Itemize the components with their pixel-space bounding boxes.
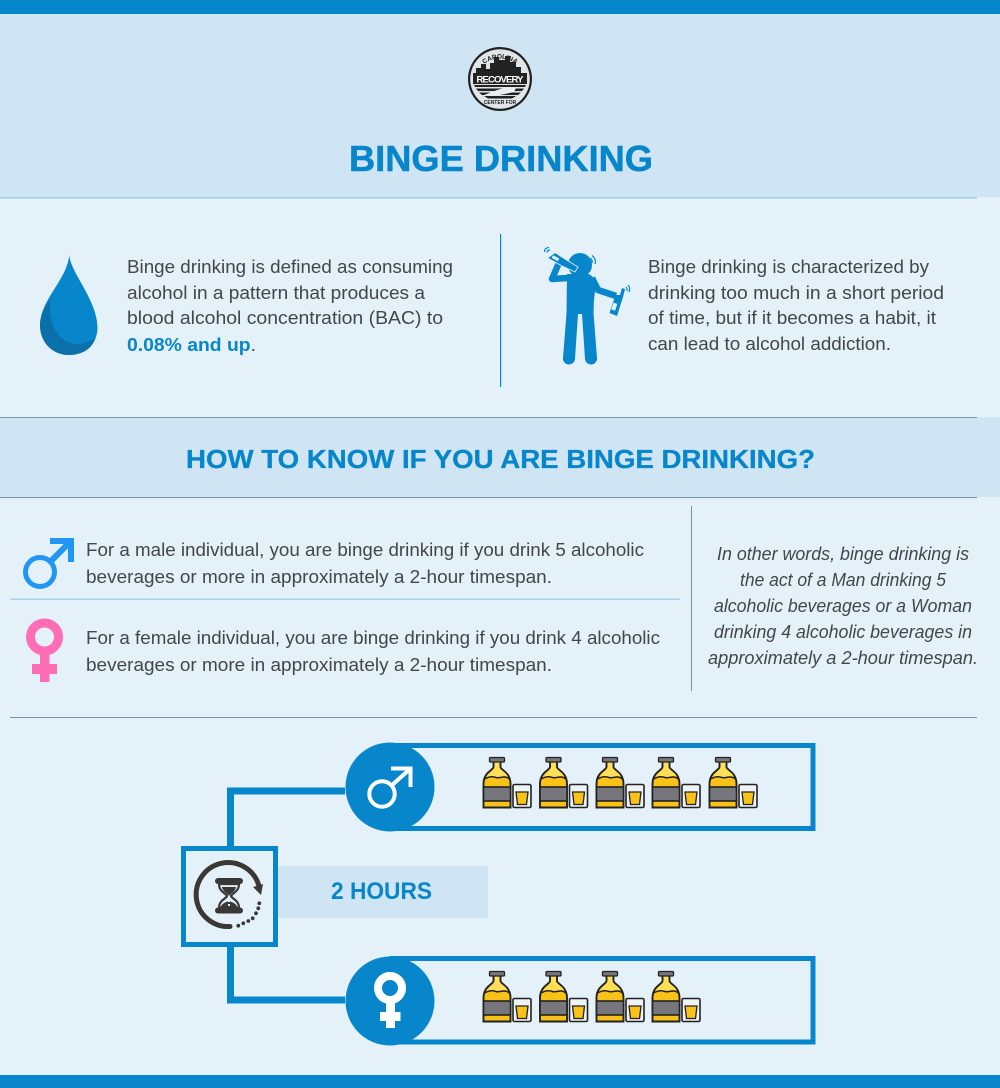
bottom bar: [0, 1075, 1000, 1088]
text: characterization: of time, but if it becomes a habit, it: [648, 307, 936, 328]
icon: hourglass with circular arrow: [196, 863, 263, 928]
text: BAC definition: Binge drinking is defined as consuming: [127, 256, 453, 277]
top bar: [0, 0, 1000, 14]
male badge: [346, 742, 434, 832]
text: in other words: drinking 4 alcoholic beverages in: [714, 621, 972, 642]
text: characterization: [648, 256, 944, 354]
logo: Carolina Recovery Center: RECOVERY: [476, 74, 524, 86]
icon: male symbol: [26, 541, 71, 586]
five bottles and glasses: [484, 758, 757, 808]
row divider: [10, 598, 680, 600]
text: in other words: approximately a 2-hour timespan.: [708, 647, 978, 668]
text: characterization: Binge drinking is characterized by: [648, 256, 930, 277]
text: in other words: [708, 543, 978, 668]
raised arm: [552, 265, 568, 279]
logo: Carolina Recovery Center: CAROLINA: [482, 54, 517, 64]
2 hours label: [278, 866, 488, 918]
icon: blood drop: [40, 255, 98, 355]
text: BAC definition: [127, 256, 453, 355]
header band: [0, 14, 1000, 198]
female drinks panel: [346, 956, 813, 1046]
bottle in hand: [610, 288, 625, 316]
logo: Carolina Recovery Center: [468, 47, 532, 111]
text: characterization: drinking too much in a short period: [648, 282, 944, 303]
icon: person drinking from bottle: [544, 248, 630, 365]
vertical divider: [500, 234, 501, 387]
male drinks panel: [346, 742, 813, 832]
lowered arm: [592, 278, 616, 296]
2 hours label: 2 HOURS: [331, 878, 432, 905]
female badge: [346, 956, 434, 1046]
text: characterization: can lead to alcohol addiction.: [648, 333, 891, 354]
title: BINGE DRINKING: [349, 138, 653, 179]
text: BAC definition: alcohol in a pattern that produces a: [127, 282, 426, 303]
text: BAC definition: blood alcohol concentration (BAC) to: [127, 307, 443, 328]
text: BAC definition: 0.08% and up .: [127, 334, 256, 355]
head: [568, 253, 592, 277]
section band: [0, 417, 1000, 498]
text: in other words: the act of a Man drinking 5: [740, 569, 947, 590]
hourglass box: [184, 848, 276, 944]
text: in other words: In other words, binge drinking is: [717, 543, 969, 564]
text: in other words: alcoholic beverages or a Woman: [714, 595, 972, 616]
text: male rule: For a male individual, you are binge drinking if you drink 5 alcoholic: [86, 539, 644, 560]
torso and legs: [563, 274, 597, 365]
divider: [10, 717, 977, 718]
text: female rule: beverages or more in approximately a 2-hour timespan.: [86, 654, 552, 675]
connector lines: [230, 791, 345, 1000]
motion marks: [544, 248, 630, 292]
four bottles and glasses: [484, 972, 700, 1022]
text: male rule: [86, 539, 644, 587]
logo: Carolina Recovery Center: CENTER FOR: [484, 100, 517, 106]
icon: female symbol: [30, 623, 58, 682]
bottle at mouth: [548, 252, 578, 272]
text: male rule: beverages or more in approximately a 2-hour timespan.: [86, 566, 552, 587]
text: female rule: For a female individual, you are binge drinking if you drink 4 alcoholic: [86, 627, 660, 648]
section heading: HOW TO KNOW IF YOU ARE BINGE DRINKING?: [186, 444, 815, 474]
vertical divider: [691, 506, 692, 691]
text: female rule: [86, 627, 660, 675]
